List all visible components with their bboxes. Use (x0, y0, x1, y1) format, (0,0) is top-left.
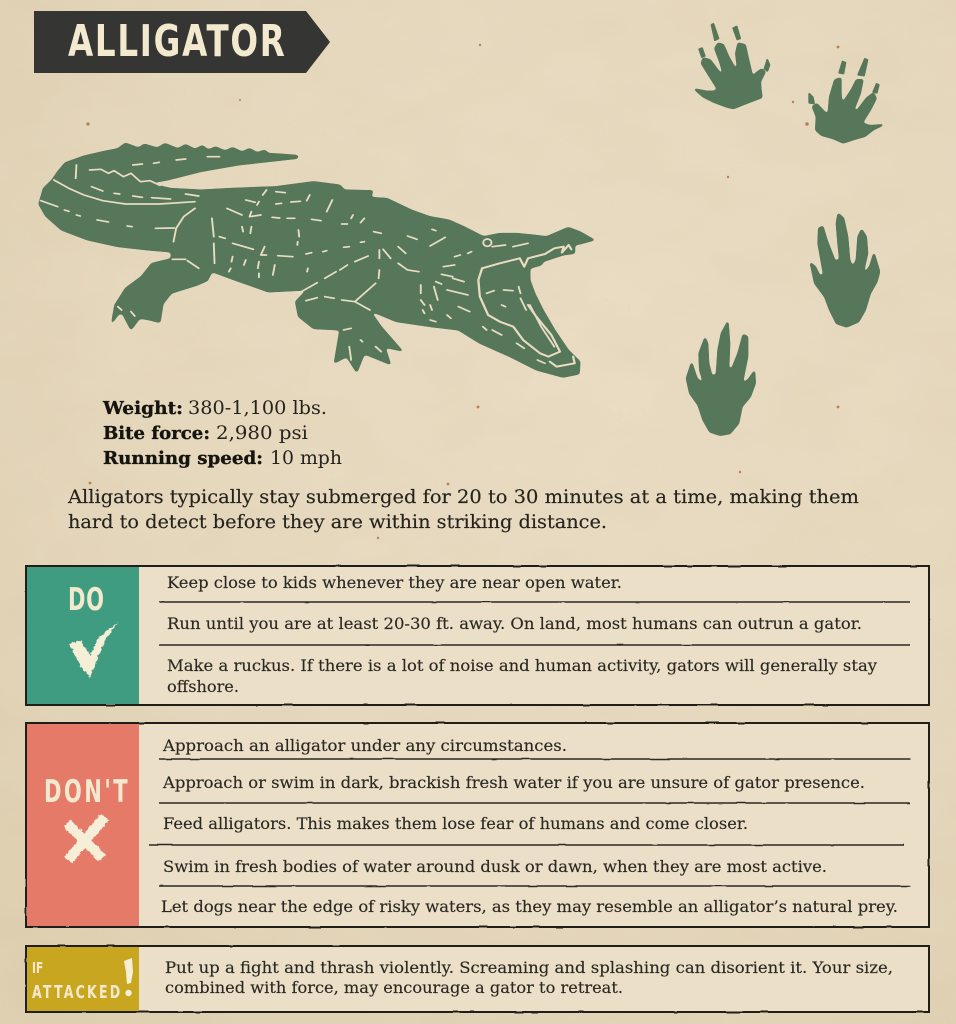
if attacked label (32, 960, 120, 1003)
if attacked text (165, 959, 893, 997)
intro paragraph: hard to detect before they are within striking distance. (68, 512, 607, 533)
panel: don't (26, 723, 929, 927)
if attacked badge (27, 947, 139, 1011)
scale markings (41, 157, 554, 363)
if attacked label: IF (32, 960, 43, 978)
footprint: top right (809, 59, 883, 143)
alligator illustration (39, 143, 595, 377)
if attacked label: ATTACKED (32, 982, 120, 1003)
stats block: 10 mph (270, 448, 342, 469)
don't list: Approach an alligator under any circumstances. (162, 737, 567, 755)
do list: Make a ruckus. If there is a lot of noise and human activity, gators will generally stay (167, 657, 877, 675)
stats block: Weight: (102, 398, 183, 419)
do list: Keep close to kids whenever they are near open water. (167, 574, 622, 592)
do badge (27, 567, 139, 704)
don't label: DON'T (44, 774, 128, 810)
stats block: 380-1,100 lbs. (188, 398, 327, 419)
do list: offshore. (167, 678, 239, 696)
open mouth outline and teeth (478, 245, 575, 367)
icon: check mark (69, 622, 118, 678)
stats block: 2,980 psi (216, 423, 308, 444)
don't list: Feed alligators. This makes them lose fear of humans and come closer. (163, 815, 748, 833)
icon: cross mark (67, 817, 105, 860)
icon: exclamation mark (124, 958, 133, 996)
footprint: lower left (687, 322, 755, 435)
don't list: Let dogs near the edge of risky waters, as they may resemble an alligator’s natural prey. (161, 898, 898, 916)
stats block: Running speed: (103, 448, 263, 469)
don't list: Swim in fresh bodies of water around dusk or dawn, when they are most active. (163, 858, 827, 876)
if attacked text: combined with force, may encourage a gator to retreat. (165, 979, 623, 997)
title text: ALLIGATOR (68, 16, 285, 67)
footprint: middle right (811, 214, 879, 327)
do list: Run until you are at least 20-30 ft. away. On land, most humans can outrun a gator. (167, 615, 862, 633)
intro paragraph: Alligators typically stay submerged for 20 to 30 minutes at a time, making them (67, 487, 859, 508)
do label: DO (68, 582, 104, 618)
intro paragraph (67, 487, 859, 533)
don't list: Approach or swim in dark, brackish fresh water if you are unsure of gator presence. (162, 774, 865, 792)
do list (159, 574, 910, 696)
eye (483, 239, 492, 246)
don't list (149, 737, 910, 916)
panel: if attacked (26, 946, 929, 1012)
alligator body silhouette (39, 143, 595, 377)
don't badge (27, 724, 139, 926)
stats block: Bite force: (103, 423, 210, 444)
if attacked text: Put up a fight and thrash violently. Screaming and splashing can disorient it. Your size, (165, 959, 893, 977)
title banner (34, 11, 330, 73)
footprint: top left (695, 24, 769, 108)
panel: do (26, 566, 929, 705)
stats block (102, 398, 342, 469)
